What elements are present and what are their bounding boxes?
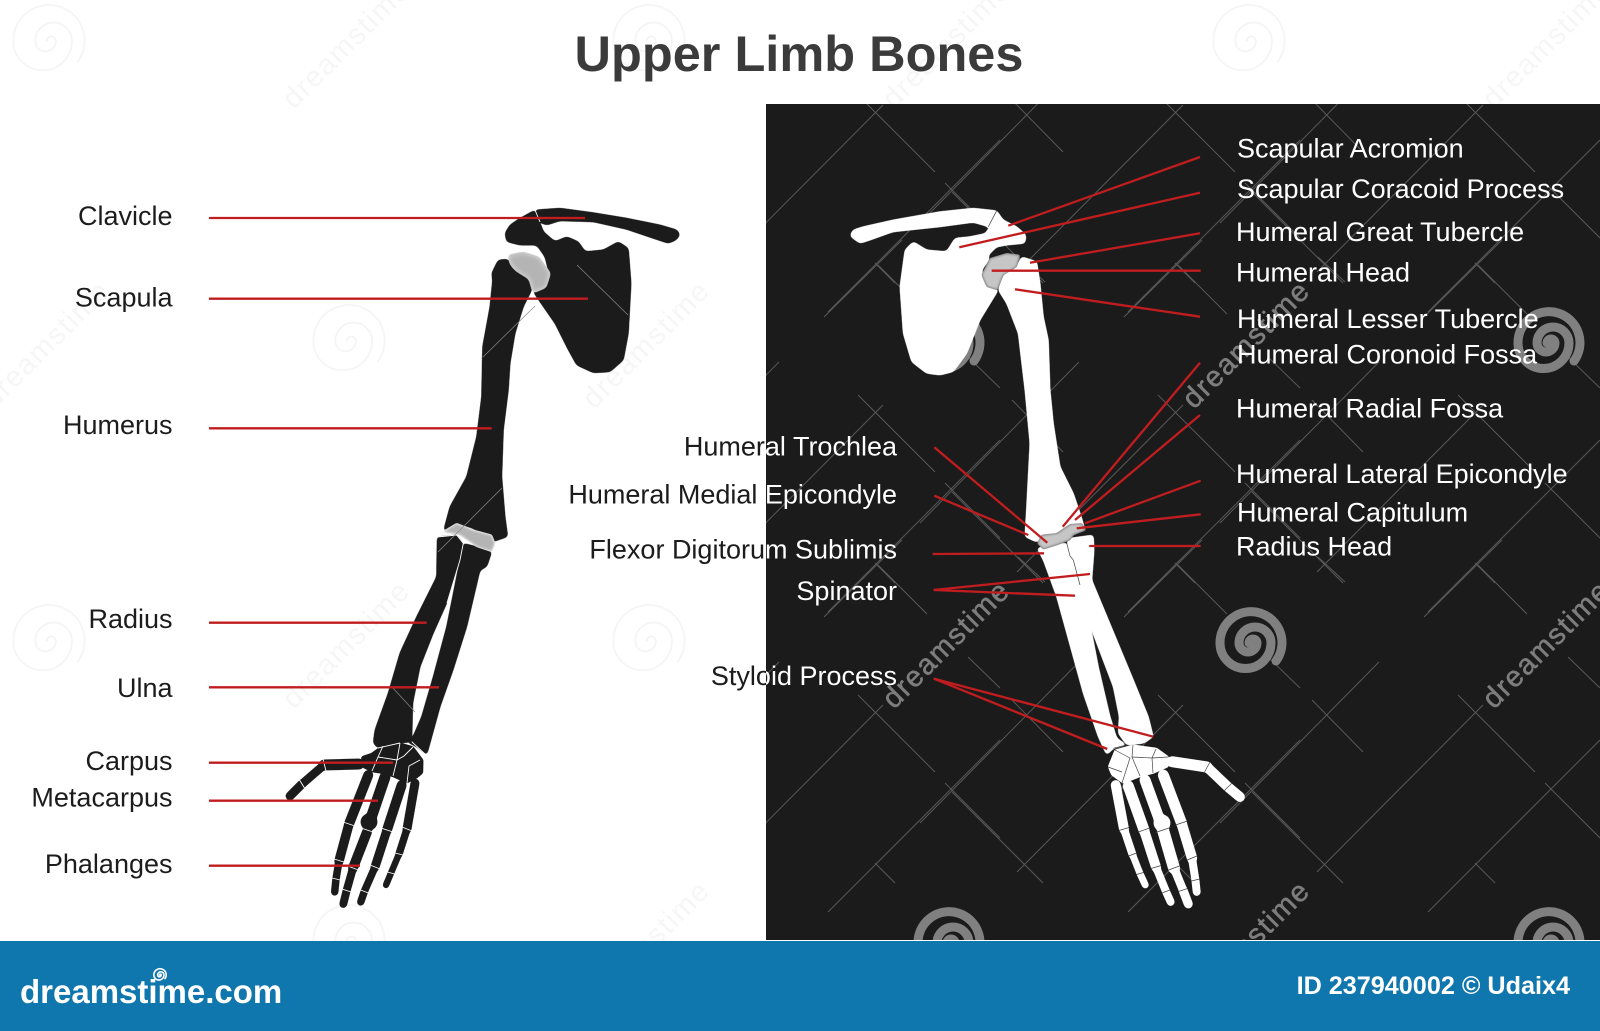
- label: scapular coracoid process: Scapular Coracoid Process: [1237, 174, 1564, 204]
- bone: humeral head: [508, 252, 550, 293]
- bone: humerus: [443, 259, 532, 542]
- hand: white joint lines: [300, 210, 540, 893]
- bone: trochlea: [443, 523, 495, 552]
- watermark on white area: dreamstime: [276, 575, 417, 715]
- label: humeral trochlea: Humeral Trochlea: [684, 432, 898, 462]
- label: humeral medial epicondyle: Humeral Medial Epicondyle: [568, 480, 897, 510]
- panel: dark anatomy panel: dreamstime: [1176, 875, 1317, 1015]
- hand: carpal bones: [1108, 745, 1168, 783]
- bone: ulna: [1037, 543, 1127, 755]
- bone: trochlea: [1037, 523, 1086, 549]
- hand: black finger bones: [290, 764, 415, 904]
- panel: dark anatomy panel: dreamstime: [876, 575, 1017, 715]
- labels: left arm: [31, 201, 173, 879]
- label: ulna: Ulna: [117, 673, 173, 703]
- label: humeral capitulum: Humeral Capitulum: [1237, 498, 1468, 528]
- watermark on white area: dreamstime: [576, 275, 717, 415]
- labels: right column: [1236, 134, 1568, 562]
- label: metacarpus: Metacarpus: [31, 782, 172, 812]
- footer logo: dreamstime.com: [20, 973, 282, 1010]
- label: styloid process: Styloid Process: [711, 661, 897, 691]
- label: flexor digitorum sublimis: Flexor Digitorum Sublimis: [589, 534, 897, 564]
- label: humeral lateral epicondyle: Humeral Lateral Epicondyle: [1236, 459, 1568, 489]
- footer bar: [0, 941, 1600, 1031]
- label: humeral coronoid fossa: Humeral Coronoid Fossa: [1237, 340, 1538, 370]
- bone: scapula: [505, 210, 631, 373]
- skeleton: black arm on white side: [290, 208, 680, 904]
- label: humeral lesser tubercle: Humeral Lesser Tubercle: [1237, 304, 1539, 334]
- label: scapula: Scapula: [75, 282, 173, 312]
- bone: humeral head: [982, 253, 1020, 290]
- skeleton: white arm on dark panel: [850, 208, 1240, 904]
- bone: clavicle: [535, 208, 680, 243]
- label: humeral great tubercle: Humeral Great Tubercle: [1236, 217, 1524, 247]
- hand: dark joint lines: [988, 211, 1232, 893]
- watermark strokes on black bones: [392, 265, 628, 712]
- leader lines: right arm: [933, 157, 1201, 749]
- labels: centre, straddling the panel edge: [568, 432, 898, 691]
- panel: dark anatomy panel: dreamstime: [1176, 275, 1317, 415]
- label: spinator: Spinator: [796, 576, 897, 606]
- hand: carpal bones: [362, 743, 423, 783]
- label: humeral head: Humeral Head: [1236, 258, 1410, 288]
- bone: scapula: [900, 227, 1007, 375]
- bone: radius: [1067, 535, 1153, 745]
- leader lines: left arm: [209, 218, 588, 866]
- bone: clavicle and acromion: [850, 208, 1026, 247]
- footer image id: ID 237940002 © Udaix4: [1297, 972, 1570, 1000]
- label: radius head: Radius Head: [1236, 532, 1392, 562]
- bone: ulna: [407, 543, 492, 755]
- label: radius: Radius: [88, 604, 172, 634]
- title: Upper Limb Bones: [575, 25, 1023, 82]
- label: humeral radial fossa: Humeral Radial Fossa: [1236, 394, 1504, 424]
- label: humerus: Humerus: [63, 410, 172, 440]
- hand: white finger bones: [1116, 762, 1240, 904]
- label: scapular acromion: Scapular Acromion: [1237, 134, 1464, 164]
- label: clavicle: Clavicle: [78, 201, 172, 231]
- label: carpus: Carpus: [85, 746, 172, 776]
- watermark on white area: dreamstime: [576, 875, 717, 1015]
- bone: radius: [373, 535, 463, 748]
- bone: humerus: [998, 257, 1085, 542]
- label: phalanges: Phalanges: [45, 849, 172, 879]
- panel: dark anatomy panel: [766, 104, 1600, 940]
